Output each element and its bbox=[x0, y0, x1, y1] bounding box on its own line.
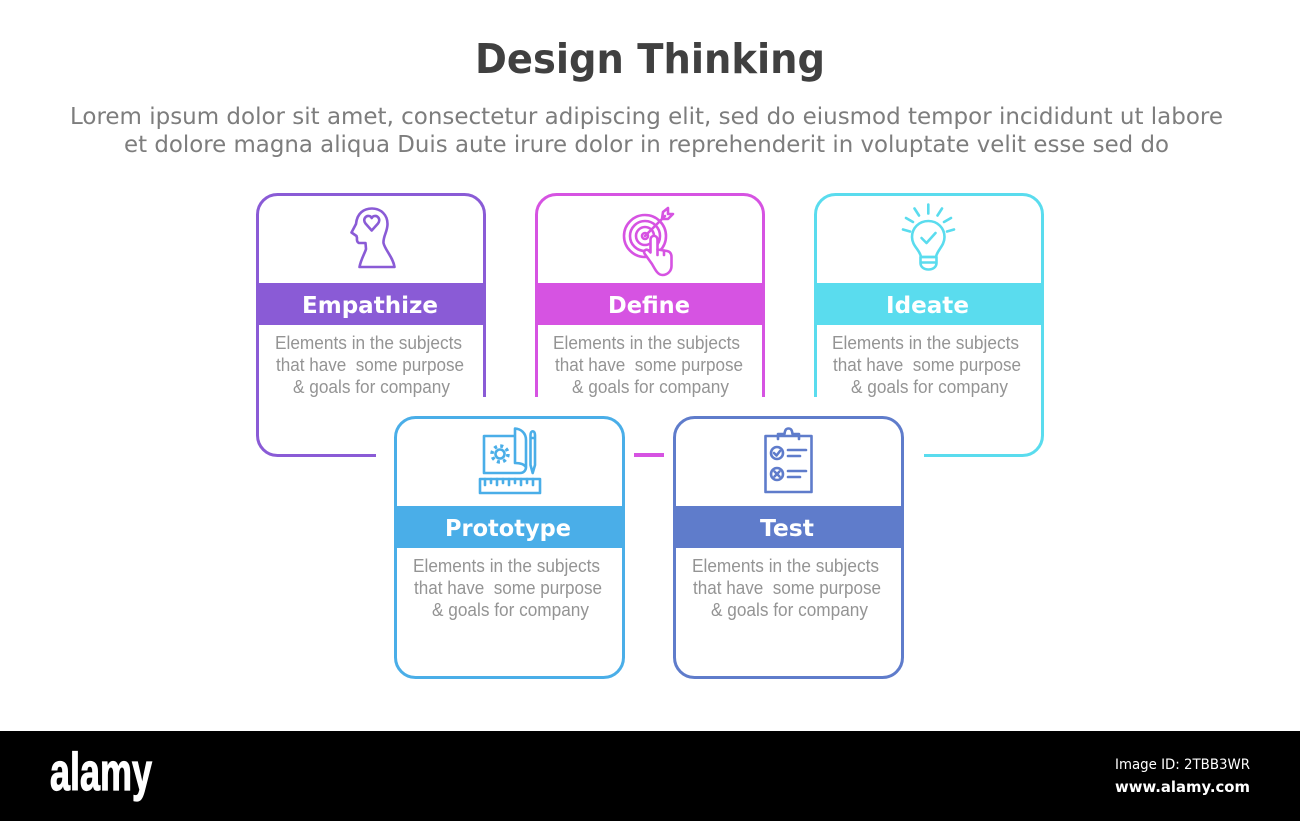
text block: Ideate: & goals for company bbox=[851, 377, 1008, 397]
heading: Empathize: Empathize bbox=[302, 293, 438, 319]
icon: clipboard checklist bbox=[766, 428, 812, 492]
heading: Ideate: Ideate bbox=[886, 293, 969, 319]
text block: Prototype: Elements in the subjects bbox=[413, 556, 600, 576]
title: Design Thinking bbox=[475, 35, 825, 83]
text block: Empathize: & goals for company bbox=[293, 377, 450, 397]
text block: Empathize: that have some purpose bbox=[276, 355, 464, 375]
connector: magenta segment bbox=[634, 453, 664, 456]
panel: Test bbox=[673, 418, 904, 678]
text block: Test: that have some purpose bbox=[693, 578, 881, 598]
text block: Test: & goals for company bbox=[711, 600, 868, 620]
text block: Define: & goals for company bbox=[572, 377, 729, 397]
panel: Prototype bbox=[394, 418, 625, 678]
text block: Test bbox=[692, 556, 881, 620]
text block: Ideate bbox=[832, 333, 1021, 397]
intro text: Lorem ipsum dolor sit amet, consectetur adipiscing elit, sed do eiusmod tempor incididunt ut labore bbox=[70, 104, 1223, 130]
text block: Prototype: & goals for company bbox=[432, 600, 589, 620]
website: www.alamy.com bbox=[1115, 778, 1250, 796]
text block: Ideate: Elements in the subjects bbox=[832, 333, 1019, 353]
text block: Define bbox=[553, 333, 743, 397]
heading: Define: Define bbox=[608, 293, 690, 319]
panel: Ideate bbox=[814, 194, 1044, 456]
intro text bbox=[70, 104, 1223, 158]
icon: blueprint, pencil and ruler bbox=[480, 428, 540, 493]
text block: Test: Elements in the subjects bbox=[692, 556, 879, 576]
icon: head with heart bbox=[352, 208, 394, 267]
logo: alamy: alamy bbox=[50, 743, 152, 802]
text block: Prototype: that have some purpose bbox=[414, 578, 602, 598]
text block: Empathize: Elements in the subjects bbox=[275, 333, 462, 353]
panel: Empathize bbox=[256, 194, 486, 456]
text block: Empathize bbox=[275, 333, 464, 397]
white gap around lower cards bbox=[376, 397, 924, 700]
panel: Define bbox=[535, 194, 765, 456]
text block: Ideate: that have some purpose bbox=[833, 355, 1021, 375]
footer bar bbox=[0, 731, 1300, 821]
icon: target with hand bbox=[624, 208, 673, 275]
icon: light bulb with check bbox=[903, 204, 954, 270]
heading: Test: Test bbox=[760, 516, 814, 542]
image id: Image ID: 2TBB3WR bbox=[1115, 757, 1250, 773]
text block: Define: Elements in the subjects bbox=[553, 333, 740, 353]
heading: Prototype: Prototype bbox=[445, 516, 571, 542]
text block: Define: that have some purpose bbox=[555, 355, 743, 375]
text block: Prototype bbox=[413, 556, 602, 620]
intro text: et dolore magna aliqua Duis aute irure dolor in reprehenderit in voluptate velit esse sed do bbox=[124, 132, 1169, 158]
